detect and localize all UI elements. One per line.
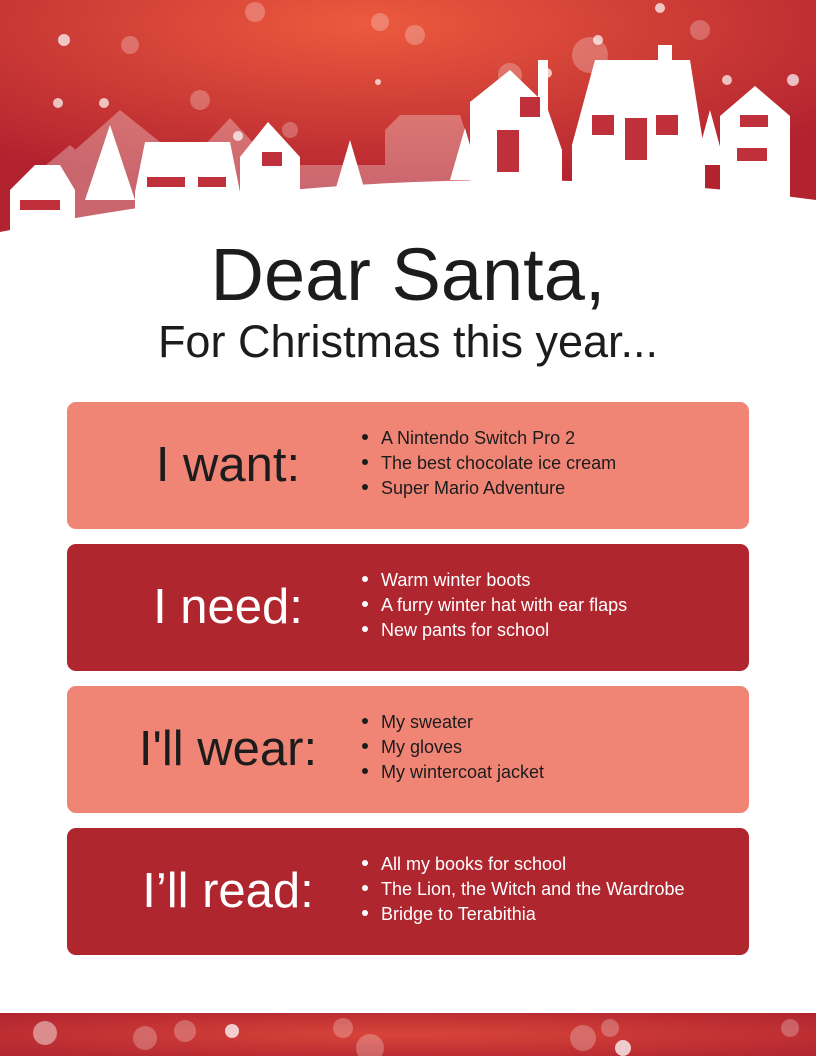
panel: I'll read: The Lion, the Witch and the Wardrobe [381, 879, 684, 899]
panel: I want: I want: [156, 438, 300, 492]
panel: I'll read: I’ll read: [142, 864, 314, 918]
title: Dear Santa, [211, 233, 605, 316]
panel: I'll wear: I'll wear: [139, 722, 317, 776]
subtitle: For Christmas this year... [158, 316, 658, 367]
panel: I'll read: Bridge to Terabithia [381, 904, 536, 924]
panel: I want: A Nintendo Switch Pro 2 [381, 428, 575, 448]
panel: I need: Warm winter boots [381, 570, 530, 590]
panel: I'll wear: My wintercoat jacket [381, 762, 544, 782]
panel: I need [67, 544, 749, 671]
panel: I need: I need: [153, 580, 303, 634]
panel: I need: New pants for school [381, 620, 549, 640]
panel: I'll wear: My gloves [381, 737, 462, 757]
header: christmas village [0, 0, 816, 232]
panel: I need: A furry winter hat with ear flaps [381, 595, 627, 615]
panel: I want: The best chocolate ice cream [381, 453, 616, 473]
panel: I want: Super Mario Adventure [381, 478, 565, 498]
white houses and trees [0, 45, 816, 240]
panel: I'll read [67, 828, 749, 955]
faded houses [40, 110, 480, 240]
panel: I want [67, 402, 749, 529]
panel: I'll read: All my books for school [381, 854, 566, 874]
panel: I'll wear: My sweater [381, 712, 473, 732]
footer band [0, 1013, 816, 1056]
panel: I'll wear [67, 686, 749, 813]
